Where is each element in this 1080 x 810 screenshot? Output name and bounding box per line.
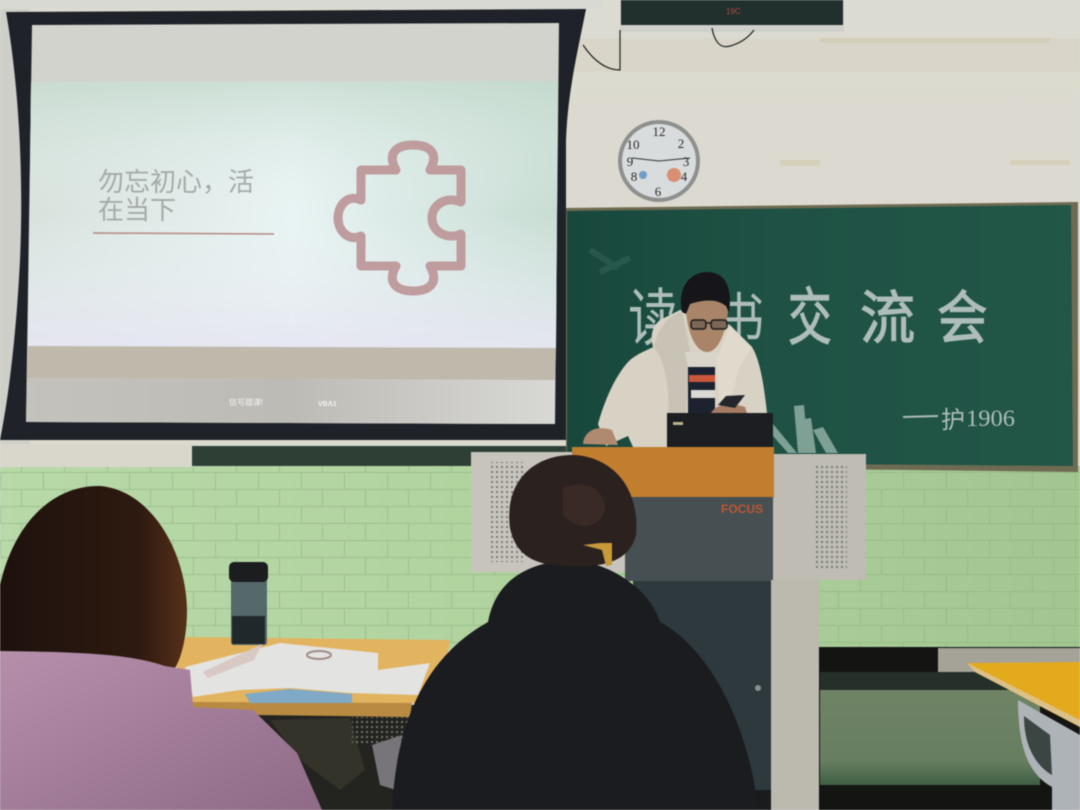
- chalk title: 交: [788, 283, 832, 353]
- figure: student left: [0, 486, 322, 810]
- wall clock: 6: [655, 184, 662, 199]
- open book and papers: [185, 643, 430, 703]
- wall clock: 2: [678, 136, 684, 151]
- chalk title: [628, 283, 988, 353]
- air conditioner display: [583, 0, 844, 70]
- chalk signature: 1906: [966, 406, 1015, 431]
- slide footer: 信号踏课!: [229, 397, 263, 407]
- podium: FOCUS: [721, 502, 763, 516]
- green brick wall: [0, 444, 1080, 650]
- presenter: [583, 272, 767, 447]
- air conditioner display: 19C: [726, 7, 741, 16]
- thermos: [229, 562, 268, 645]
- slide footer: VBA1: [318, 401, 337, 408]
- chalk rulers: [773, 405, 838, 453]
- wall clock: [618, 120, 700, 202]
- slide title: [98, 167, 254, 225]
- wall clock: 4: [681, 169, 688, 184]
- wall clock: 12: [652, 124, 666, 139]
- blackboard: [566, 202, 1078, 472]
- chalk title: 读: [628, 284, 678, 353]
- desk left: [175, 637, 450, 717]
- wall clock: 10: [626, 137, 640, 152]
- under-desk shadow and bag: [190, 705, 440, 810]
- hair: [681, 272, 730, 314]
- floor platform: [819, 647, 1080, 810]
- figure: student centre: [392, 455, 758, 810]
- undershirt collar: [685, 352, 718, 368]
- coat: [598, 310, 767, 447]
- podium: [471, 447, 866, 810]
- striped shirt: [688, 367, 715, 413]
- projection screen: [0, 0, 602, 466]
- laptop: [667, 413, 773, 448]
- wall clock: 8: [631, 169, 637, 184]
- yellow desk right: [967, 662, 1080, 810]
- slide title: 在当下: [98, 195, 176, 225]
- slide: [26, 23, 559, 424]
- chalk signature: 护: [941, 407, 965, 434]
- chalk title: 会: [937, 287, 988, 351]
- wall clock: 9: [627, 154, 633, 169]
- slide footer: [229, 397, 337, 408]
- head: [686, 294, 729, 352]
- chalk signature: [903, 406, 1015, 434]
- icon: puzzle piece: [338, 145, 461, 291]
- chalk title: 流: [860, 286, 915, 350]
- wall clock: 3: [683, 154, 689, 169]
- chalk title: 书: [718, 289, 764, 353]
- glasses: [691, 320, 727, 329]
- phone and hands: [711, 404, 747, 413]
- slide title: 勿忘初心，活: [98, 167, 254, 197]
